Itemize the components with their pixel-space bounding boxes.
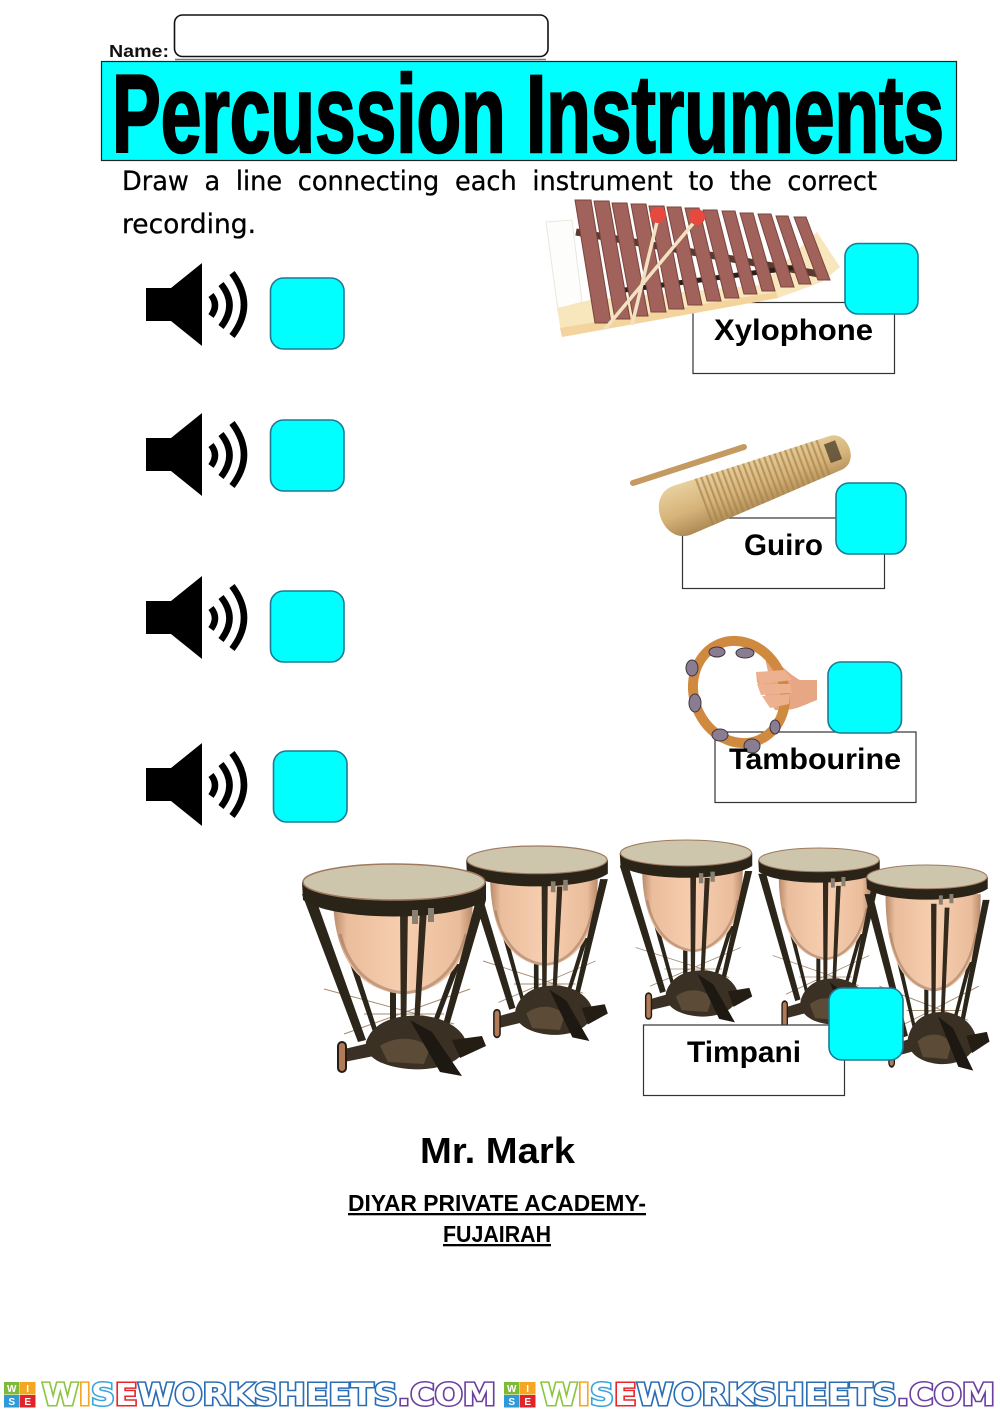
footer watermark	[4, 1378, 995, 1413]
instructions: Draw a line connecting each instrument to the correct	[122, 166, 877, 197]
recording 4: speaker and answer box	[146, 743, 347, 826]
timpani answer box	[829, 988, 903, 1060]
tambourine answer box	[828, 662, 902, 733]
guiro answer box	[836, 483, 906, 554]
school name: DIYAR PRIVATE ACADEMY-	[348, 1190, 646, 1216]
instructions	[122, 166, 877, 240]
drum 5	[864, 865, 990, 1071]
footer logo right	[504, 1382, 536, 1408]
icon: speaker 1	[146, 263, 244, 346]
icon: speaker 3	[146, 576, 244, 659]
xylophone label: Xylophone	[714, 314, 873, 347]
answer box 3	[270, 591, 344, 662]
guiro label: Guiro	[744, 529, 823, 562]
name input box	[174, 15, 548, 60]
drum 1	[302, 864, 486, 1076]
icon: speaker 4	[146, 743, 244, 826]
xylophone label box	[693, 302, 894, 374]
footer wordmark right: WISEWORKSHEETS .COM	[541, 1378, 995, 1413]
recording 3: speaker and answer box	[146, 576, 344, 662]
xylophone answer box	[845, 244, 918, 314]
drum 3	[620, 840, 752, 1022]
teacher name: Mr. Mark	[420, 1130, 576, 1171]
drum 4	[758, 848, 880, 1030]
image: tambourine	[678, 627, 817, 757]
name label: Name:	[109, 41, 169, 61]
image: guiro	[633, 423, 858, 543]
answer box 2	[270, 420, 344, 491]
timpani label box	[644, 1025, 844, 1096]
guiro label box	[682, 518, 884, 588]
tambourine label box	[715, 732, 916, 802]
image: timpani set	[302, 840, 990, 1076]
answer box 4	[274, 751, 347, 822]
timpani label: Timpani	[687, 1036, 801, 1069]
icon: speaker 2	[146, 413, 244, 496]
answer box 1	[270, 278, 344, 349]
school name	[348, 1190, 646, 1247]
school name: FUJAIRAH	[443, 1221, 551, 1247]
recording 2: speaker and answer box	[146, 413, 344, 496]
footer wordmark left: WISEWORKSHEETS .COM	[42, 1378, 496, 1413]
footer logo left	[4, 1382, 36, 1408]
title banner	[102, 53, 956, 176]
instructions: recording.	[122, 209, 256, 240]
image: xylophone	[546, 200, 840, 337]
tambourine label: Tambourine	[729, 743, 901, 776]
recording 1: speaker and answer box	[146, 263, 344, 349]
drum 2	[466, 846, 608, 1041]
